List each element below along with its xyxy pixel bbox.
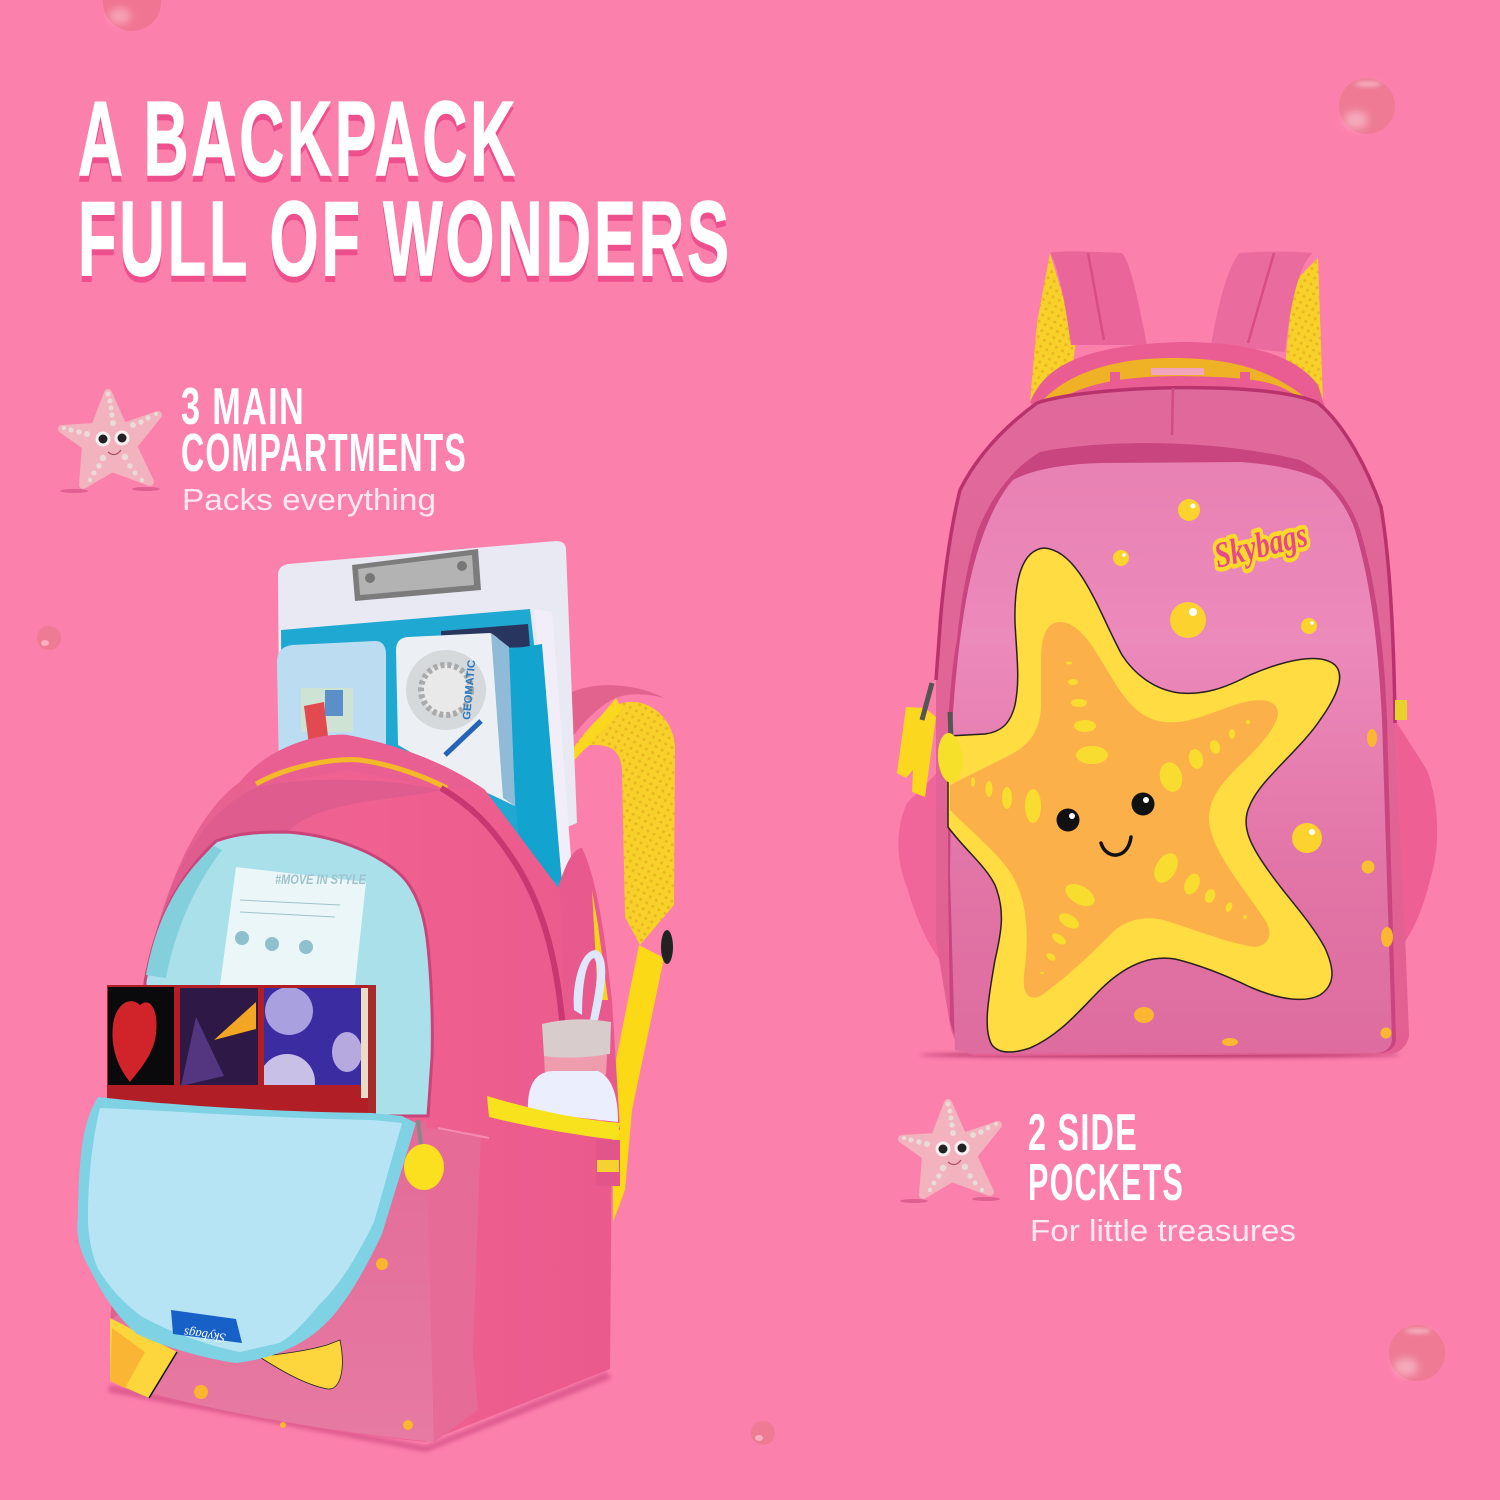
shoulder straps [1030, 252, 1323, 403]
heading: 3 main compartments: 3 MAIN [181, 378, 305, 436]
title: A BACKPACK [78, 86, 518, 204]
top handle [1030, 342, 1326, 420]
title: A BACKPACK [78, 80, 518, 198]
bubble: bottom right [1389, 1325, 1445, 1381]
lower side band [426, 1128, 481, 1442]
zipper seam [441, 788, 566, 1100]
star spots [971, 662, 1250, 974]
face [1056, 792, 1154, 855]
front flap open [77, 1097, 416, 1363]
logo: Skybags: Skybags [1210, 514, 1311, 576]
side pocket right [1395, 720, 1437, 942]
heading: 2 side pockets: 2 SIDE [1028, 1104, 1138, 1162]
side pocket trim [487, 1096, 620, 1140]
backpack: left, open with contents [77, 541, 675, 1452]
zipper pulls [897, 683, 964, 797]
star peeking [110, 1318, 342, 1398]
bubble highlights [1122, 504, 1315, 835]
title: FULL OF WONDERS [78, 186, 732, 304]
body [936, 388, 1409, 1056]
title [78, 80, 732, 304]
side label [596, 1140, 620, 1186]
icon: starfish left [60, 392, 160, 493]
front flap open: Skybags [183, 1325, 226, 1346]
bottle [528, 950, 618, 1122]
book [107, 985, 376, 1114]
side pocket left [898, 770, 940, 960]
star outline [948, 548, 1340, 1052]
outer zipper [936, 388, 1395, 723]
yellow dots [194, 1258, 413, 1430]
heading: 2 side pockets: POCKETS [1028, 1154, 1184, 1212]
front panel [950, 462, 1392, 1054]
zipper pull: yellow [404, 1120, 444, 1190]
geometry box: GEOMATIC [461, 659, 478, 720]
main body [110, 735, 612, 1442]
clip [352, 549, 481, 601]
backpack: right, front view [897, 252, 1437, 1058]
inner zipper panel [948, 443, 1396, 1054]
text: for little treasures: For little treasures [1030, 1213, 1296, 1248]
bubble: bottom small [751, 1421, 775, 1445]
bubble: left small [37, 626, 61, 650]
ground shadow [108, 1372, 612, 1452]
ground shadow [920, 1052, 1400, 1058]
hash move in style card: #MOVE IN STYLE [275, 871, 367, 887]
text: packs everything: Packs everything [182, 482, 436, 517]
top panel shade [146, 780, 441, 975]
notebook [534, 609, 572, 880]
heading: 3 main compartments [181, 378, 467, 483]
clipboard [278, 541, 577, 830]
blue inner [145, 832, 432, 1116]
geometry box [396, 633, 515, 806]
bubbles on pack [1113, 499, 1393, 1046]
logo: Skybags: Skybags [1210, 514, 1311, 576]
lunch box [277, 641, 386, 775]
star inner [950, 622, 1278, 998]
hash move in style card [220, 867, 367, 985]
lower front panel [110, 1120, 434, 1442]
back panel [558, 848, 620, 1130]
title: FULL OF WONDERS [78, 180, 732, 298]
bubble: top left [103, 0, 161, 31]
heading: 3 main compartments: COMPARTMENTS [181, 423, 467, 483]
heading: 2 side pockets [1028, 1104, 1184, 1212]
bubble: top right [1339, 78, 1395, 134]
seam top [1172, 388, 1173, 435]
right tab [1395, 700, 1407, 720]
handle [240, 735, 485, 790]
folder [281, 609, 562, 890]
icon: starfish right [900, 1102, 1000, 1203]
strap [558, 685, 675, 1222]
